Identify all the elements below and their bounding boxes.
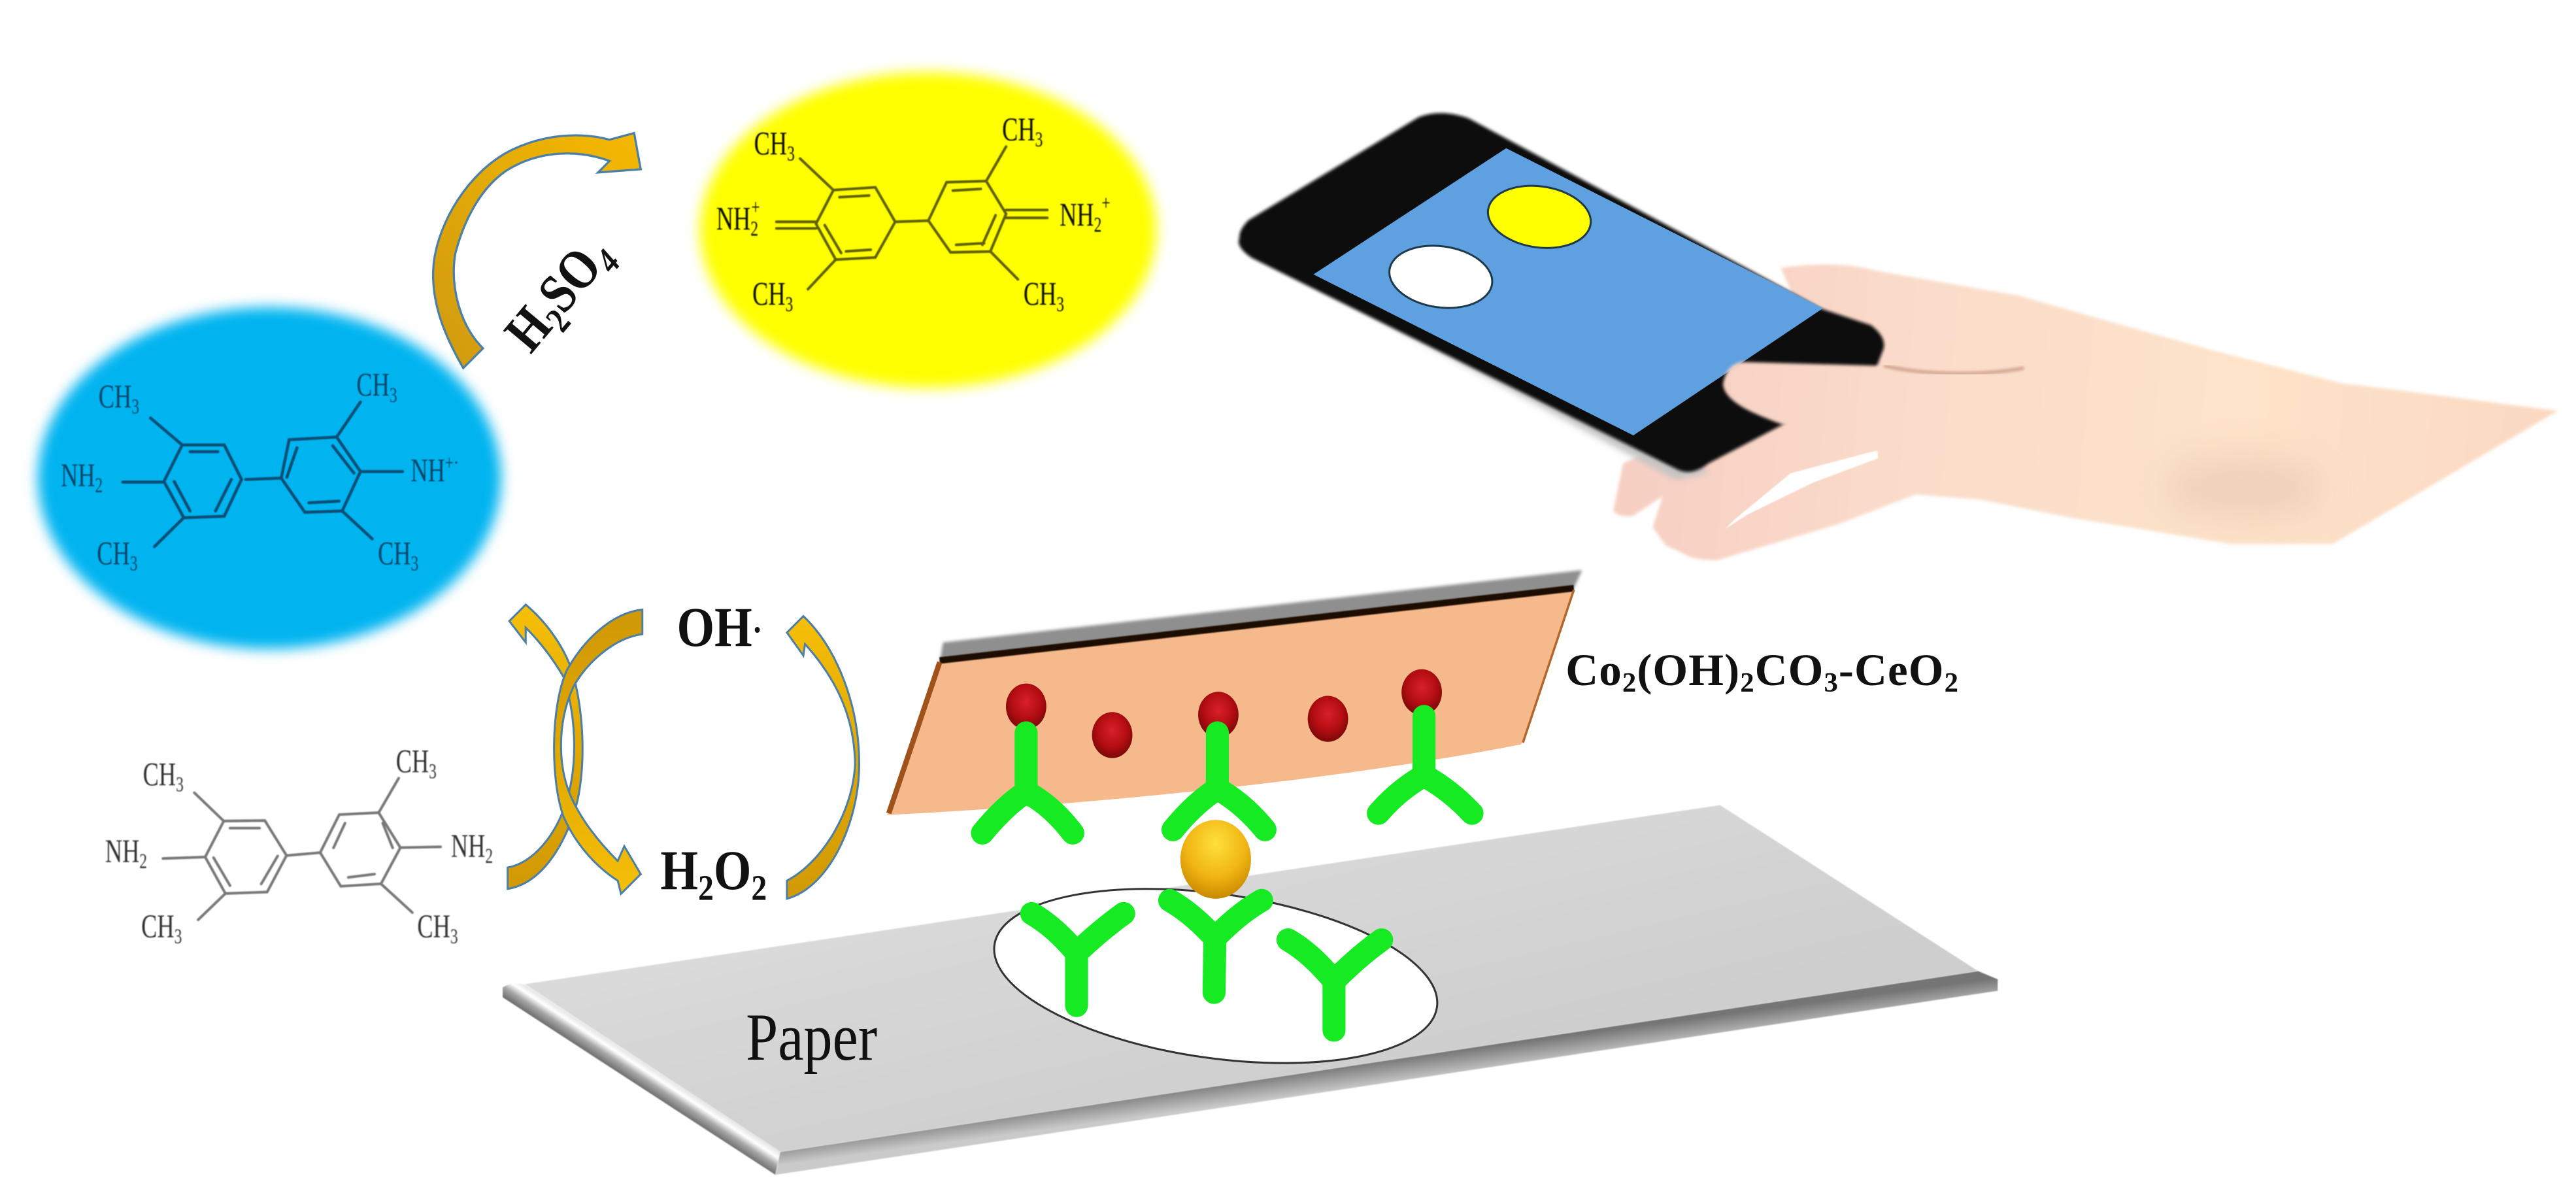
plate face <box>887 588 1574 815</box>
result spot: white <box>1385 239 1496 314</box>
label: H2SO4: 4 <box>588 243 629 280</box>
blue molecule structure: 3 <box>390 383 397 407</box>
result spot: yellow <box>1484 179 1595 254</box>
paper strip <box>503 805 1998 1175</box>
yellow molecule structure: 2 <box>750 217 758 241</box>
label: H2SO4: H <box>493 295 564 363</box>
yellow molecule structure: CH <box>752 275 786 312</box>
yellow molecule structure: 2 <box>1094 213 1101 237</box>
reagent TMB molecule: 3 <box>176 773 184 797</box>
reagent TMB molecule: CH <box>143 755 176 793</box>
label: Paper: Paper <box>746 1000 877 1075</box>
yellow molecule structure: NH <box>1060 195 1094 233</box>
yellow molecule structure: 3 <box>1035 127 1043 152</box>
test zone ellipse <box>983 864 1448 1088</box>
label: Co2(OH)2CO3-CeO2: 3 <box>1824 667 1838 698</box>
gold antigen particle <box>1180 820 1251 899</box>
red nanoparticles <box>1006 669 1442 758</box>
yellow molecule structure: 3 <box>786 292 793 316</box>
reagent TMB molecule <box>105 742 493 949</box>
yellow molecule structure: 3 <box>1056 292 1064 316</box>
phone screen <box>1313 148 1823 435</box>
label: Co2(OH)2CO3-CeO2: (OH) <box>1637 645 1739 695</box>
reagent TMB molecule: 2 <box>485 844 493 868</box>
label: H2SO4: SO <box>526 236 614 324</box>
yellow spot: diimine oxidation product <box>700 73 1156 388</box>
reagent TMB molecule: 3 <box>429 759 437 783</box>
label: H2O2: 2 <box>751 868 767 908</box>
strip top surface <box>525 805 1978 1152</box>
blue molecule structure: CH <box>356 366 390 403</box>
strip front edge <box>775 971 1998 1175</box>
thumb <box>1723 362 2152 477</box>
label: Co2(OH)2CO3-CeO2: -CeO <box>1839 645 1944 695</box>
plate right edge <box>1523 590 1574 743</box>
reagent TMB molecule: 3 <box>450 924 458 949</box>
label: Co2(OH)2CO3-CeO2: Co <box>1565 645 1622 695</box>
label: OH radical: OH <box>677 597 752 658</box>
reagent TMB molecule: NH <box>451 827 485 865</box>
arrow: blue to yellow oxidation <box>433 133 641 368</box>
detection antibodies <box>982 716 1472 833</box>
phone body <box>1239 113 1884 472</box>
capture antibodies <box>1031 900 1382 1030</box>
wrist shading <box>2164 455 2321 521</box>
yellow molecule structure: 3 <box>787 141 795 165</box>
blue molecule structure: CH <box>378 534 411 572</box>
reagent TMB molecule: CH <box>396 742 429 780</box>
label: Co2(OH)2CO3-CeO2: CO <box>1755 645 1823 695</box>
blue molecule structure: +· <box>445 450 459 475</box>
label: H2SO4: 2 <box>539 302 578 339</box>
yellow molecule structure: CH <box>754 124 787 162</box>
arrow: H2O2 to OH radical <box>787 616 860 899</box>
thumb crease <box>1884 365 2024 373</box>
strip left bevel <box>503 984 780 1175</box>
blue molecule structure: 3 <box>131 395 139 418</box>
blue molecule structure: NH <box>410 451 445 489</box>
reagent TMB molecule: CH <box>141 907 175 945</box>
blue molecule structure: 3 <box>411 552 418 576</box>
arrow: OH radical to H2O2 <box>554 609 643 894</box>
gap between fingers <box>1725 450 1878 529</box>
plate left edge <box>889 662 940 813</box>
yellow molecule structure: + <box>751 195 760 220</box>
label: H2O2: 2 <box>698 868 714 908</box>
blue molecule structure: NH <box>61 456 95 494</box>
yellow molecule structure: + <box>1101 191 1111 215</box>
smartphone and hand <box>1239 113 2558 560</box>
blue molecule structure: CH <box>99 377 131 415</box>
phone rim <box>1244 233 1709 480</box>
detection nanosheet plate <box>887 570 1582 815</box>
label: H2O2: H <box>660 840 698 901</box>
yellow molecule structure: CH <box>1024 275 1056 312</box>
label: H2O2: O <box>714 840 751 901</box>
label: OH radical: · <box>752 611 763 650</box>
yellow molecule structure <box>716 110 1111 316</box>
blue molecule structure <box>61 366 459 576</box>
blue blurred ellipse <box>38 307 501 649</box>
blue molecule structure: CH <box>97 534 130 572</box>
label: Co2(OH)2CO3-CeO2: 2 <box>1622 667 1636 698</box>
hand <box>1613 265 2558 560</box>
reagent TMB molecule: CH <box>417 907 450 945</box>
yellow molecule structure: NH <box>716 199 750 237</box>
arrow: TMB to oxidized form <box>508 605 582 889</box>
plate top edge <box>940 588 1574 660</box>
reagent TMB molecule: 3 <box>175 924 182 949</box>
blue molecule structure: 3 <box>130 552 137 576</box>
plate shadow band <box>940 570 1582 662</box>
label: Co2(OH)2CO3-CeO2: 2 <box>1945 667 1958 698</box>
blue spot: oxidized TMB radical cation <box>38 307 501 649</box>
reagent TMB molecule: NH <box>105 832 139 870</box>
yellow molecule structure: CH <box>1002 110 1035 148</box>
blue molecule structure: 2 <box>95 473 103 497</box>
reagent TMB molecule: 2 <box>139 849 147 873</box>
label: Co2(OH)2CO3-CeO2: 2 <box>1740 667 1754 698</box>
yellow blurred ellipse <box>700 73 1156 388</box>
